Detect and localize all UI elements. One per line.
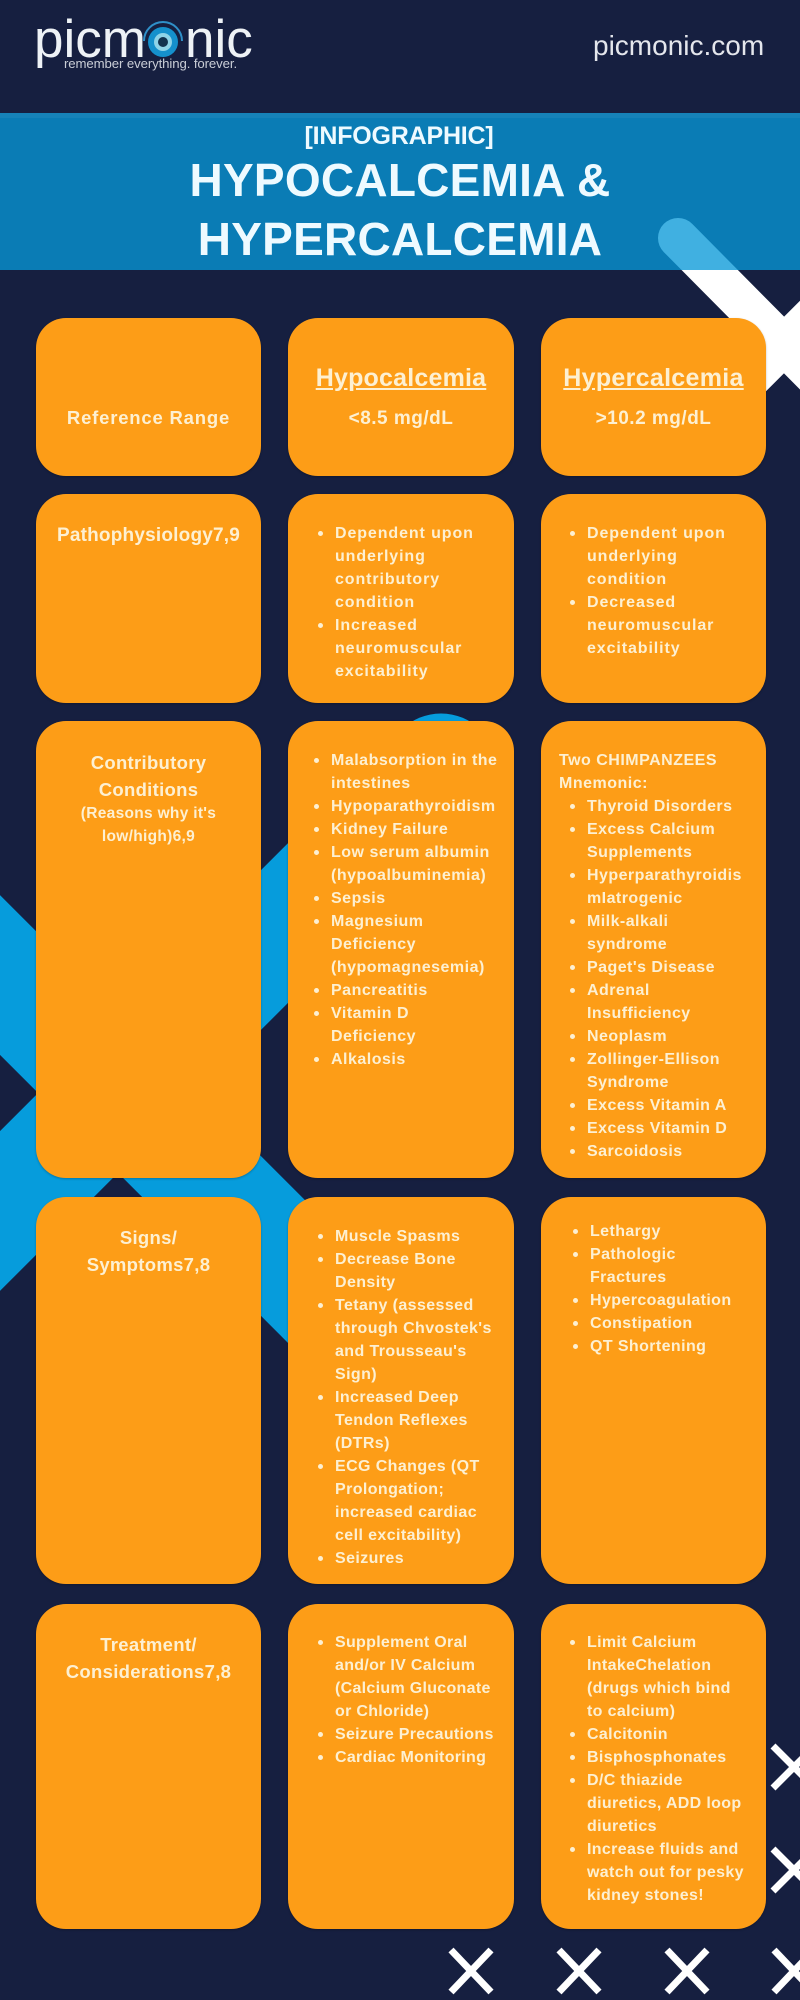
list: hypercalcemia signs: Pathologic (590, 1246, 676, 1263)
list: hypercalcemia treatment: watch out for pesky (587, 1864, 744, 1881)
list: hypocalcemia signs: cell excitability) (335, 1527, 461, 1544)
list: hypocalcemia signs: ECG Changes (QT (335, 1458, 480, 1475)
value: hypercalcemia range: >10.2 mg/dL (596, 408, 711, 429)
list: hypocalcemia treatment: and/or IV Calcium (335, 1657, 475, 1674)
list: pathophysiology hypercalcemia: Decreased (587, 594, 676, 611)
list: pathophysiology hypocalcemia: excitability (335, 663, 429, 680)
panel: signs hypercalcemia (541, 1197, 766, 1584)
panel: pathophysiology label (36, 494, 261, 703)
list: hypocalcemia signs: through Chvostek's (335, 1320, 492, 1337)
panel: hypercalcemia range (541, 318, 766, 476)
panel: contributory conditions hypocalcemia (288, 721, 514, 1178)
list: hypocalcemia conditions: Kidney Failure (331, 821, 448, 838)
list: hypercalcemia conditions: Excess Vitamin D (587, 1120, 727, 1137)
panel: pathophysiology hypocalcemia (288, 494, 514, 703)
list: hypocalcemia conditions: Magnesium (331, 913, 424, 930)
list: hypocalcemia conditions: Pancreatitis (331, 982, 428, 999)
list: hypercalcemia treatment: Limit Calcium (587, 1634, 696, 1651)
list: pathophysiology hypercalcemia: underlying (587, 548, 678, 565)
heading: hypocalcemia: Hypocalcemia (316, 364, 486, 392)
list: hypocalcemia signs: Tendon Reflexes (335, 1412, 468, 1429)
logo eye (143, 21, 183, 57)
list: hypercalcemia conditions: Supplements (587, 844, 692, 861)
list: hypocalcemia conditions: (hypomagnesemia) (331, 959, 485, 976)
logo tagline: remember everything. forever. (64, 56, 237, 71)
list: hypocalcemia signs: Prolongation; (335, 1481, 444, 1498)
mnemonic intro (559, 752, 717, 792)
list: hypercalcemia conditions: Zollinger-Ellison (587, 1051, 720, 1068)
panel: treatment label (36, 1604, 261, 1929)
panel: reference range label (36, 318, 261, 476)
panel: contributory conditions label (36, 721, 261, 1178)
heading: contributory conditions: Conditions (99, 779, 198, 800)
heading: hypercalcemia: Hypercalcemia (563, 364, 744, 392)
panel: signs and symptoms label (36, 1197, 261, 1584)
panel: treatment hypocalcemia (288, 1604, 514, 1929)
infographic tag: [INFOGRAPHIC] (304, 122, 494, 150)
list: hypercalcemia signs: QT Shortening (590, 1338, 706, 1355)
list: hypocalcemia conditions: Deficiency (331, 1028, 416, 1045)
list: hypocalcemia signs: and Trousseau's (335, 1343, 467, 1360)
logo wordmark right: nic (185, 10, 253, 69)
website: picmonic.com (593, 30, 764, 61)
title: HYPERCALCEMIA (198, 213, 602, 265)
list: hypercalcemia treatment (570, 1634, 744, 1904)
heading: treatment (66, 1634, 231, 1682)
list: hypercalcemia treatment: D/C thiazide (587, 1772, 683, 1789)
list: hypocalcemia conditions: Low serum albumin (331, 844, 490, 861)
heading: pathophysiology: Pathophysiology7,9 (57, 525, 240, 546)
list: hypocalcemia signs: Decrease Bone (335, 1251, 456, 1268)
large blue X (0, 770, 441, 1315)
heading: treatment: Treatment/ (100, 1634, 197, 1655)
list: hypocalcemia conditions: Deficiency (331, 936, 416, 953)
subheading: reasons: (Reasons why it's (81, 805, 216, 822)
logo (34, 10, 253, 71)
list: hypercalcemia conditions (570, 798, 742, 1160)
mnemonic intro: Two CHIMPANZEES (559, 752, 717, 769)
heading: signs and symptoms (87, 1227, 210, 1275)
list: hypercalcemia conditions: Excess Vitamin A (587, 1097, 727, 1114)
panel: hypocalcemia range (288, 318, 514, 476)
list: pathophysiology hypercalcemia: excitability (587, 640, 681, 657)
list: hypercalcemia treatment: diuretics, ADD loop (587, 1795, 742, 1812)
list: hypocalcemia conditions: Alkalosis (331, 1051, 406, 1068)
heading: signs and symptoms: Symptoms7,8 (87, 1254, 210, 1275)
list: pathophysiology hypocalcemia: contributory (335, 571, 440, 588)
list: hypercalcemia conditions: Insufficiency (587, 1005, 691, 1022)
list: hypercalcemia conditions: syndrome (587, 936, 667, 953)
small white X marks (451, 1746, 800, 1992)
heading: contributory conditions: Contributory (91, 752, 206, 773)
list: hypocalcemia signs: (DTRs) (335, 1435, 390, 1452)
list: hypercalcemia treatment: Calcitonin (587, 1726, 668, 1743)
list: pathophysiology hypocalcemia: neuromuscular (335, 640, 462, 657)
list: hypercalcemia conditions: Neoplasm (587, 1028, 667, 1045)
list: hypocalcemia signs: increased cardiac (335, 1504, 477, 1521)
list: hypercalcemia treatment: diuretics (587, 1818, 657, 1835)
heading: reference range: Reference Range (67, 407, 230, 428)
list: hypocalcemia treatment: Seizure Precautions (335, 1726, 494, 1743)
list: hypercalcemia conditions: Sarcoidosis (587, 1143, 683, 1160)
list: pathophysiology hypocalcemia: condition (335, 594, 415, 611)
subheading: reasons: low/high)6,9 (102, 828, 195, 845)
list: hypercalcemia conditions: Excess Calcium (587, 821, 715, 838)
list: pathophysiology hypocalcemia: Dependent upon (335, 525, 474, 542)
list: hypocalcemia treatment (318, 1634, 494, 1766)
list: hypocalcemia conditions: Hypoparathyroidism (331, 798, 496, 815)
list: hypercalcemia treatment: IntakeChelation (587, 1657, 711, 1674)
white X top right (678, 229, 800, 462)
list: hypocalcemia conditions: Vitamin D (331, 1005, 409, 1022)
list: pathophysiology hypocalcemia: underlying (335, 548, 426, 565)
list: pathophysiology hypocalcemia (318, 525, 474, 680)
list: hypercalcemia signs: Fractures (590, 1269, 667, 1286)
panel: treatment hypercalcemia (541, 1604, 766, 1929)
list: hypocalcemia signs (318, 1228, 492, 1567)
list: hypocalcemia conditions: Sepsis (331, 890, 386, 907)
list: hypocalcemia conditions: Malabsorption in the (331, 752, 497, 769)
list: hypocalcemia conditions: (hypoalbuminemia) (331, 867, 486, 884)
list: hypocalcemia signs: Sign) (335, 1366, 377, 1383)
value: hypocalcemia range: <8.5 mg/dL (349, 408, 453, 429)
panel: signs hypocalcemia (288, 1197, 514, 1584)
list: hypercalcemia conditions: Adrenal (587, 982, 650, 999)
list: hypercalcemia conditions: Paget's Disease (587, 959, 715, 976)
title: HYPOCALCEMIA & (190, 154, 610, 206)
list: hypocalcemia treatment: (Calcium Gluconate (335, 1680, 491, 1697)
list: hypercalcemia conditions: Milk-alkali (587, 913, 668, 930)
list: hypercalcemia signs: Lethargy (590, 1223, 661, 1240)
heading: signs and symptoms: Signs/ (120, 1227, 177, 1248)
list: hypocalcemia signs: Increased Deep (335, 1389, 459, 1406)
panel: contributory conditions hypercalcemia (541, 721, 766, 1178)
list: hypercalcemia treatment: Increase fluids and (587, 1841, 739, 1858)
list: hypocalcemia conditions: intestines (331, 775, 411, 792)
list: hypocalcemia signs: Seizures (335, 1550, 404, 1567)
list: hypercalcemia conditions: Thyroid Disorders (587, 798, 732, 815)
list: hypercalcemia conditions: Syndrome (587, 1074, 669, 1091)
list: hypercalcemia conditions: mIatrogenic (587, 890, 683, 907)
list: hypocalcemia treatment: or Chloride) (335, 1703, 429, 1720)
list: pathophysiology hypercalcemia (570, 525, 726, 657)
list: hypocalcemia conditions (314, 752, 497, 1068)
title banner (0, 113, 800, 270)
list: hypocalcemia treatment: Supplement Oral (335, 1634, 468, 1651)
heading: contributory conditions (91, 752, 206, 800)
mnemonic intro: Mnemonic: (559, 775, 648, 792)
list: hypocalcemia signs: Tetany (assessed (335, 1297, 474, 1314)
list: hypercalcemia signs (573, 1223, 732, 1355)
list: pathophysiology hypercalcemia: condition (587, 571, 667, 588)
list: pathophysiology hypercalcemia: neuromuscular (587, 617, 714, 634)
list: hypercalcemia signs: Hypercoagulation (590, 1292, 732, 1309)
list: hypocalcemia signs: Muscle Spasms (335, 1228, 460, 1245)
title (190, 154, 610, 265)
logo wordmark left: picm (34, 10, 146, 69)
list: pathophysiology hypocalcemia: Increased (335, 617, 418, 634)
panel: pathophysiology hypercalcemia (541, 494, 766, 703)
list: hypercalcemia treatment: kidney stones! (587, 1887, 704, 1904)
subheading: reasons (81, 805, 216, 845)
list: hypercalcemia treatment: Bisphosphonates (587, 1749, 726, 1766)
list: hypocalcemia signs: Density (335, 1274, 396, 1291)
list: pathophysiology hypercalcemia: Dependent upon (587, 525, 726, 542)
list: hypercalcemia conditions: Hyperparathyroidis (587, 867, 742, 884)
list: hypercalcemia signs: Constipation (590, 1315, 693, 1332)
list: hypocalcemia treatment: Cardiac Monitoring (335, 1749, 486, 1766)
list: hypercalcemia treatment: (drugs which bind (587, 1680, 731, 1697)
list: hypercalcemia treatment: to calcium) (587, 1703, 675, 1720)
heading: treatment: Considerations7,8 (66, 1661, 231, 1682)
